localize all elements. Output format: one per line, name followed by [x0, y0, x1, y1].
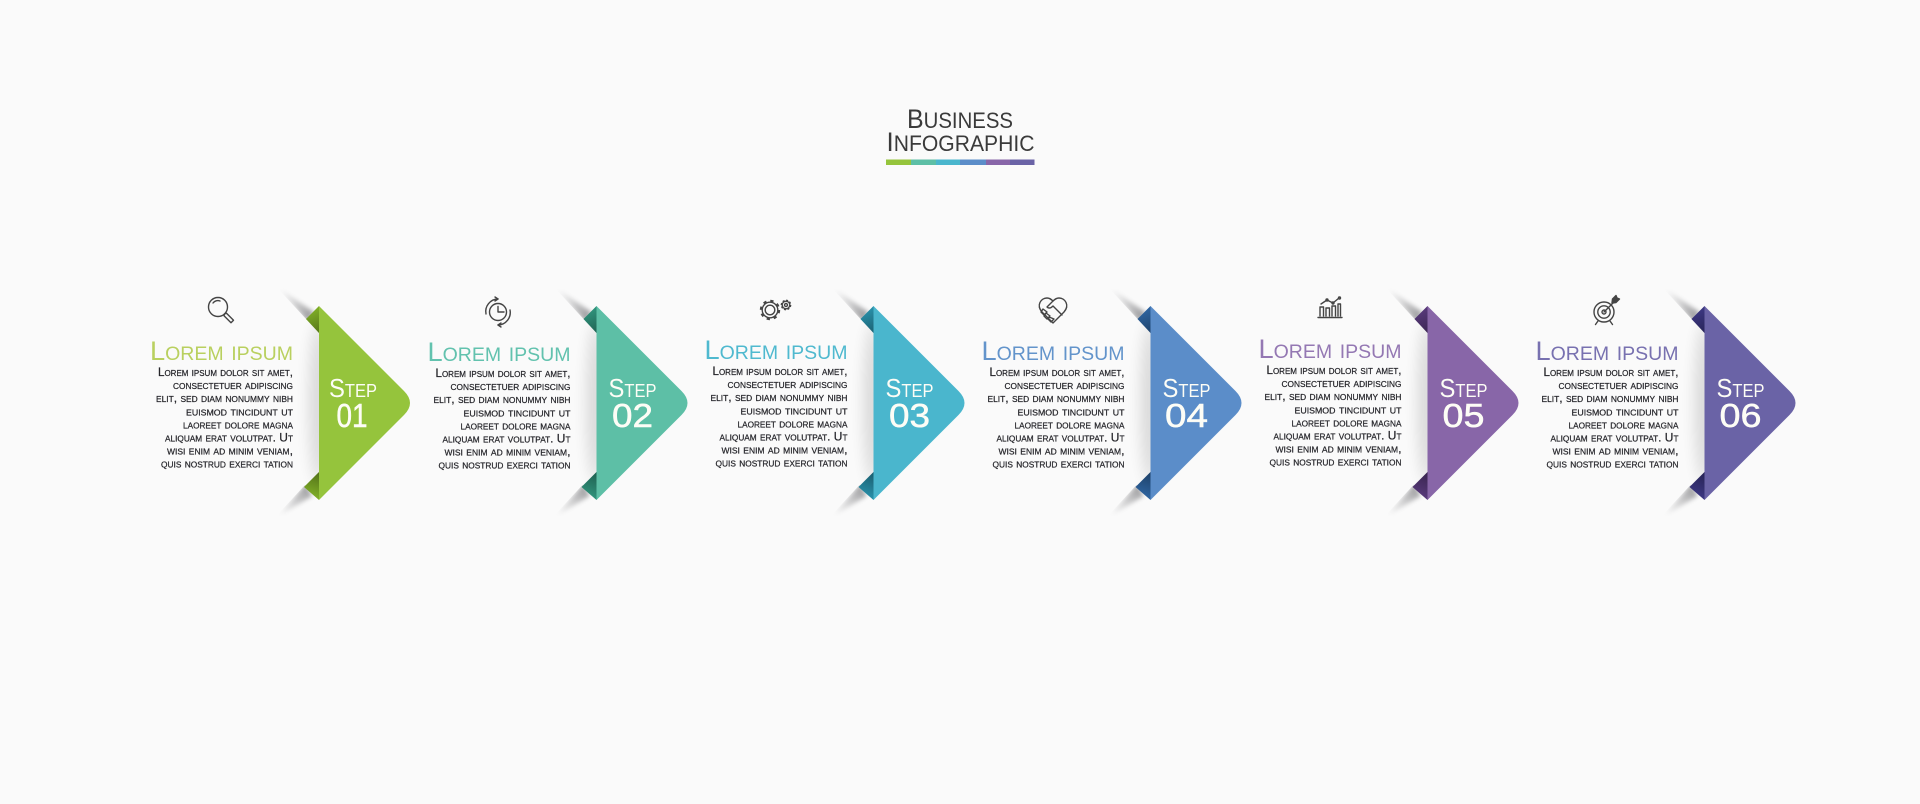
body text: laoreet dolore magna	[738, 417, 848, 430]
icon: bar chart	[1318, 297, 1342, 318]
heading: Lorem ipsum	[704, 335, 848, 365]
body text: euismod tincidunt ut	[740, 404, 848, 417]
panel: step 04	[982, 286, 1242, 518]
step label: Step	[1716, 373, 1764, 403]
step label: Step	[1162, 373, 1210, 403]
icon: clock with arrows	[486, 297, 510, 327]
body text: quis nostrud exerci tation	[716, 457, 848, 470]
fold shadows	[1670, 294, 1704, 511]
step label	[1162, 373, 1210, 434]
body text: aliquam erat volutpat. Ut	[720, 430, 848, 444]
fold tabs	[1690, 306, 1704, 500]
arrow	[596, 306, 688, 500]
title	[886, 100, 1035, 158]
body text	[1542, 366, 1679, 471]
fold tabs	[858, 306, 874, 500]
body text: aliquam erat volutpat. Ut	[442, 432, 571, 446]
fold shadows	[1116, 294, 1150, 511]
body text	[988, 366, 1125, 471]
body text: aliquam erat volutpat. Ut	[1274, 430, 1402, 442]
body text: laoreet dolore magna	[183, 418, 294, 431]
step label	[886, 373, 934, 434]
body text: Lorem ipsum dolor sit amet,	[712, 365, 848, 378]
panel: step 05	[1258, 286, 1518, 518]
step label: 01	[336, 397, 368, 434]
body text: euismod tincidunt ut	[186, 405, 293, 418]
body text: quis nostrud exerci tation	[1546, 458, 1679, 471]
body text: Lorem ipsum dolor sit amet,	[1544, 366, 1678, 379]
panel: step 02	[428, 286, 688, 518]
heading: Lorem ipsum	[428, 337, 570, 367]
body text: wisi enim ad minim veniam,	[1276, 443, 1402, 456]
fold shadows	[284, 294, 319, 511]
icon: target	[1594, 296, 1620, 324]
arrow	[1704, 306, 1796, 500]
arrow	[319, 306, 410, 500]
step label	[1440, 373, 1488, 434]
panel: step 01	[150, 286, 410, 518]
body text: consectetuer adipiscing	[1558, 379, 1678, 392]
title colour bar	[886, 160, 1034, 165]
step label: Step	[608, 373, 656, 403]
body text: consectetuer adipiscing	[1282, 377, 1402, 390]
fold tabs	[1412, 306, 1428, 500]
body text	[1264, 364, 1402, 469]
fold shadows	[1393, 294, 1428, 511]
step label: Step	[329, 373, 377, 403]
step label: 04	[1165, 397, 1208, 434]
body text: laoreet dolore magna	[1292, 416, 1402, 429]
arrow	[1428, 306, 1518, 500]
body text: consectetuer adipiscing	[1004, 379, 1124, 392]
body text: aliquam erat volutpat. Ut	[1550, 432, 1679, 444]
step label	[608, 373, 656, 434]
fold shadows	[562, 294, 596, 511]
body text: elit, sed diam nonummy nibh	[988, 392, 1125, 405]
body text: euismod tincidunt ut	[1294, 403, 1402, 416]
step label: Step	[1440, 373, 1488, 403]
heading: Lorem ipsum	[150, 336, 293, 366]
step label: 03	[889, 397, 930, 434]
step label: Step	[886, 373, 934, 403]
icon: magnifier	[208, 298, 234, 323]
body text: wisi enim ad minim veniam,	[167, 445, 293, 458]
fold tabs	[582, 306, 596, 500]
body text	[156, 366, 294, 471]
body text: Lorem ipsum dolor sit amet,	[990, 366, 1124, 379]
body text: Lorem ipsum dolor sit amet,	[1266, 364, 1402, 377]
body text: euismod tincidunt ut	[1572, 405, 1679, 418]
body text	[434, 367, 571, 472]
icon: handshake	[1039, 298, 1067, 323]
body text: consectetuer adipiscing	[173, 379, 293, 392]
body text: quis nostrud exerci tation	[438, 459, 571, 472]
body text: aliquam erat volutpat. Ut	[996, 432, 1125, 444]
body text: consectetuer adipiscing	[728, 378, 848, 391]
body text: laoreet dolore magna	[460, 419, 571, 432]
body text: elit, sed diam nonummy nibh	[434, 393, 571, 406]
heading: Lorem ipsum	[1536, 336, 1678, 366]
body text: elit, sed diam nonummy nibh	[156, 392, 293, 405]
body text: Lorem ipsum dolor sit amet,	[158, 366, 293, 379]
body text: laoreet dolore magna	[1568, 418, 1679, 431]
body text: laoreet dolore magna	[1014, 418, 1125, 431]
body text: elit, sed diam nonummy nibh	[1264, 390, 1402, 403]
step label: 06	[1720, 397, 1762, 434]
body text: euismod tincidunt ut	[1018, 405, 1125, 418]
body text: aliquam erat volutpat. Ut	[165, 432, 293, 444]
body text: wisi enim ad minim veniam,	[998, 445, 1124, 458]
arrow	[1150, 306, 1242, 500]
body text: Lorem ipsum dolor sit amet,	[436, 367, 570, 380]
body text: consectetuer adipiscing	[450, 380, 570, 393]
heading: Lorem ipsum	[982, 336, 1124, 366]
title: Infographic	[886, 123, 1035, 158]
fold tabs	[304, 306, 319, 500]
body text: quis nostrud exerci tation	[161, 458, 293, 471]
panel: step 03	[704, 286, 964, 518]
fold tabs	[1136, 306, 1150, 500]
body text: wisi enim ad minim veniam,	[1552, 445, 1678, 458]
icon: gears	[761, 300, 791, 319]
title: Business	[907, 100, 1013, 135]
step label: 02	[612, 397, 653, 434]
body text: quis nostrud exerci tation	[992, 458, 1125, 471]
body text: wisi enim ad minim veniam,	[722, 444, 848, 457]
body text: wisi enim ad minim veniam,	[444, 446, 570, 459]
arrow	[874, 306, 964, 500]
body text: euismod tincidunt ut	[464, 406, 571, 419]
heading: Lorem ipsum	[1258, 334, 1402, 364]
body text	[710, 365, 848, 470]
step label	[1716, 373, 1764, 434]
step label	[329, 373, 377, 434]
body text: elit, sed diam nonummy nibh	[710, 391, 848, 404]
body text: elit, sed diam nonummy nibh	[1542, 392, 1679, 405]
panel: step 06	[1536, 286, 1796, 518]
body text: quis nostrud exerci tation	[1270, 456, 1402, 469]
step label: 05	[1442, 397, 1484, 434]
fold shadows	[839, 294, 874, 511]
